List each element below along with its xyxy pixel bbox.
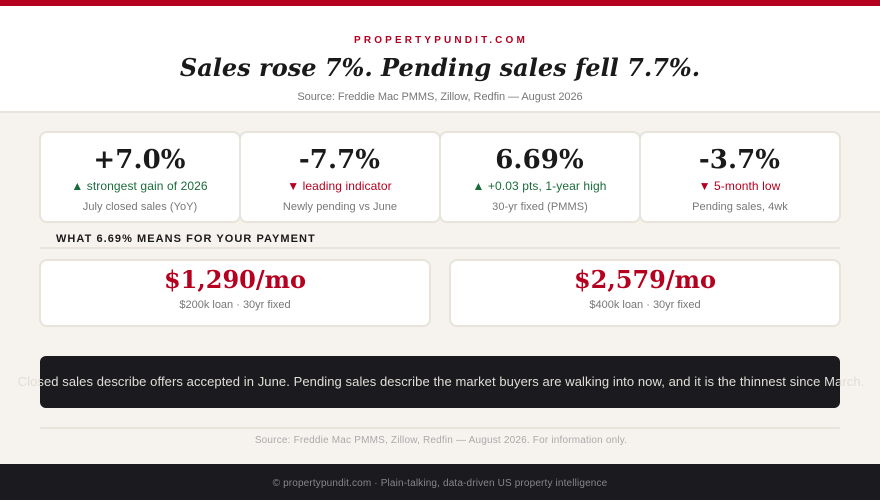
- footer bar: [0, 464, 880, 500]
- header panel: [0, 6, 880, 113]
- value: +7.0%: [93, 145, 186, 175]
- value: 6.69%: [495, 145, 584, 175]
- footer bar: © propertypundit.com · Plain-talking, data-driven US property intelligence: [273, 478, 607, 489]
- footnote: Source: Freddie Mac PMMS, Zillow, Redfin — August 2026. For information only.: [255, 435, 627, 446]
- site name: PROPERTYPUNDIT.COM: [354, 35, 528, 46]
- change note: ▼ 5-month low: [699, 179, 780, 193]
- change note: ▲ +0.03 pts, 1-year high: [472, 179, 607, 193]
- description: 30-yr fixed (PMMS): [492, 201, 588, 213]
- description: Newly pending vs June: [283, 201, 397, 213]
- value: -7.7%: [299, 145, 380, 175]
- stat card: closed sales: [39, 131, 241, 223]
- title: Sales rose 7%. Pending sales fell 7.7%.: [180, 53, 700, 82]
- payment amount: $1,290/mo: [164, 265, 306, 294]
- loan description: $200k loan · 30yr fixed: [179, 299, 291, 311]
- change note: ▲ strongest gain of 2026: [71, 179, 208, 193]
- stat card: pending sales 4wk: [639, 131, 841, 223]
- stat card: newly pending: [239, 131, 441, 223]
- description: July closed sales (YoY): [83, 201, 197, 213]
- change note: ▼ leading indicator: [287, 179, 392, 193]
- callout text: Closed sales describe offers accepted in June. Pending sales describe the market buyers are walking into now, and it is the thinnest since March.: [18, 374, 864, 389]
- stat card: mortgage rate: [439, 131, 641, 223]
- description: Pending sales, 4wk: [692, 201, 788, 213]
- payment amount: $2,579/mo: [574, 265, 716, 294]
- payment card: $200k loan: [39, 259, 431, 327]
- header source line: Source: Freddie Mac PMMS, Zillow, Redfin — August 2026: [297, 91, 583, 103]
- footnote: [40, 427, 840, 464]
- value: -3.7%: [699, 145, 780, 175]
- loan description: $400k loan · 30yr fixed: [589, 299, 701, 311]
- payment card: $400k loan: [449, 259, 841, 327]
- top accent bar: [0, 0, 880, 6]
- section heading: [40, 229, 840, 249]
- section heading: WHAT 6.69% MEANS FOR YOUR PAYMENT: [56, 233, 316, 245]
- callout panel: [40, 356, 840, 408]
